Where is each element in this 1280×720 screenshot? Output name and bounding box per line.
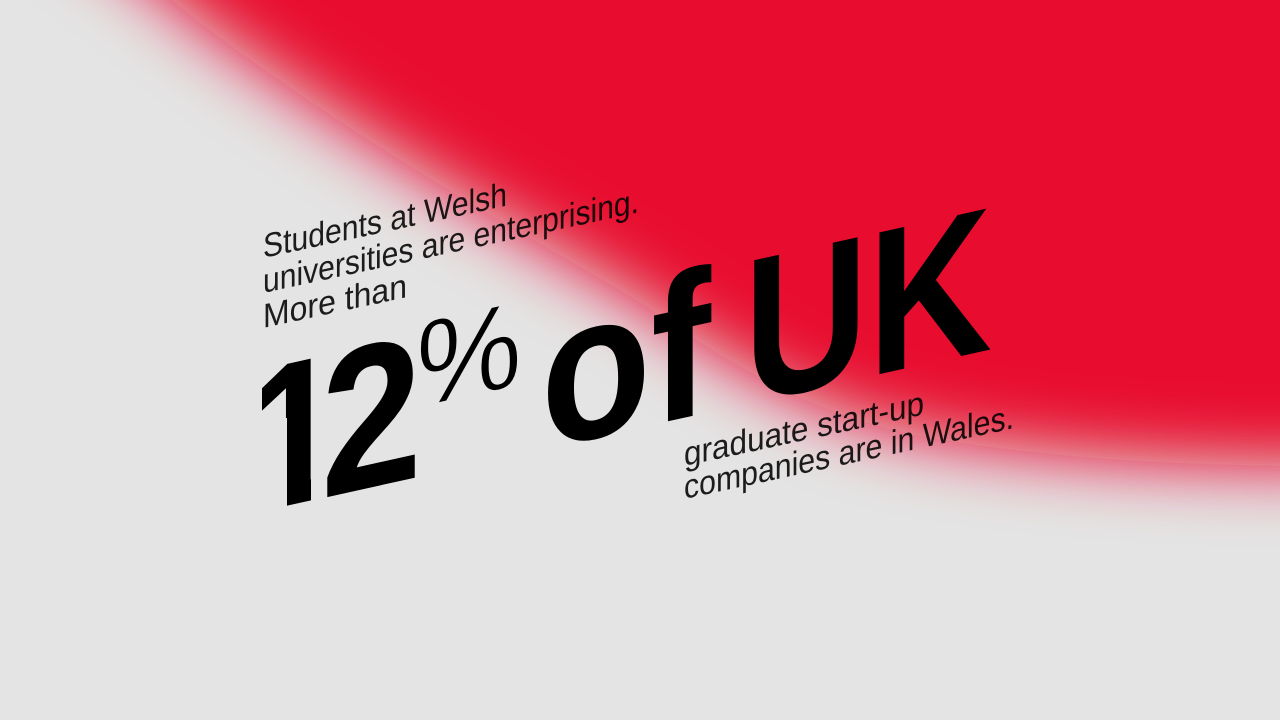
closing text bbox=[684, 385, 1014, 507]
intro line 2: universities are enterprising. bbox=[263, 183, 639, 301]
red blurred shape bbox=[0, 0, 1280, 468]
intro line 1: Students at Welsh bbox=[263, 176, 507, 266]
closing line 1: graduate start-up bbox=[684, 385, 924, 474]
figure 1: 1 bbox=[244, 307, 344, 560]
word of: of bbox=[541, 226, 711, 494]
closing line 2: companies are in Wales. bbox=[684, 398, 1014, 507]
intro line 3: More than bbox=[263, 267, 407, 336]
intro text bbox=[263, 176, 639, 336]
headline statistic bbox=[262, 208, 990, 506]
percent sign: % bbox=[416, 275, 522, 435]
word UK: UK bbox=[744, 163, 992, 449]
figure 2: 2 bbox=[321, 290, 422, 543]
